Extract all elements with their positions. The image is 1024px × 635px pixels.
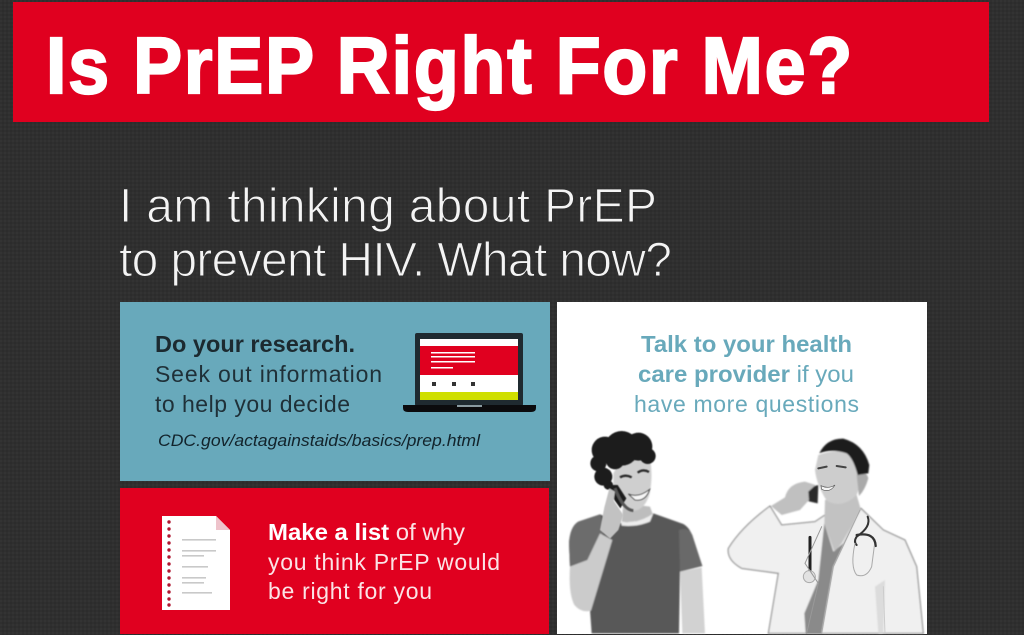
- neck: [622, 503, 653, 522]
- list text: Make a list of why: [268, 519, 466, 545]
- research text: Do your research.: [155, 331, 355, 357]
- scrubs: [804, 510, 860, 633]
- provider text: have more questions: [634, 391, 859, 417]
- t-shirt: [569, 513, 702, 633]
- heading: I am thinking about PrEP: [119, 180, 657, 233]
- panel: do your research: [120, 302, 550, 481]
- photo: man on phone: [569, 431, 705, 633]
- title: Is PrEP Right For Me?: [46, 21, 854, 110]
- doctor face details: [818, 466, 846, 468]
- stethoscope: [805, 537, 814, 572]
- phone: [608, 485, 626, 508]
- collar: [621, 513, 653, 526]
- man face details: [620, 470, 649, 477]
- ear: [857, 473, 868, 496]
- panel: make a list: [120, 488, 549, 634]
- research text: to help you decide: [155, 391, 350, 417]
- hand: [600, 488, 623, 539]
- list text: be right for you: [268, 578, 432, 604]
- hair: [819, 439, 869, 475]
- list text: [268, 519, 500, 604]
- head: [815, 451, 863, 504]
- right arm: [680, 567, 705, 633]
- head: [613, 458, 652, 511]
- provider text: Talk to your health: [641, 331, 852, 357]
- coat edge: [805, 527, 822, 633]
- provider text: care provider if you: [638, 361, 854, 387]
- title banner: [13, 2, 989, 122]
- list text: you think PrEP would: [268, 549, 500, 575]
- panel: talk to your health care provider: [557, 302, 927, 634]
- coat: [728, 506, 923, 633]
- icon: notepad: [162, 516, 230, 610]
- hair: [590, 431, 656, 490]
- research text: [155, 331, 382, 417]
- heading: to prevent HIV. What now?: [119, 234, 672, 287]
- neck: [824, 495, 861, 552]
- photo: doctor on phone: [728, 439, 923, 633]
- hand: [771, 482, 816, 515]
- provider text: [634, 331, 859, 417]
- phone: [803, 485, 818, 503]
- research link: CDC.gov/actagainstaids/basics/prep.html: [158, 431, 481, 450]
- forearm: [570, 533, 612, 611]
- icon: laptop: [403, 333, 536, 412]
- heading: [119, 180, 672, 287]
- research text: Seek out information: [155, 361, 382, 387]
